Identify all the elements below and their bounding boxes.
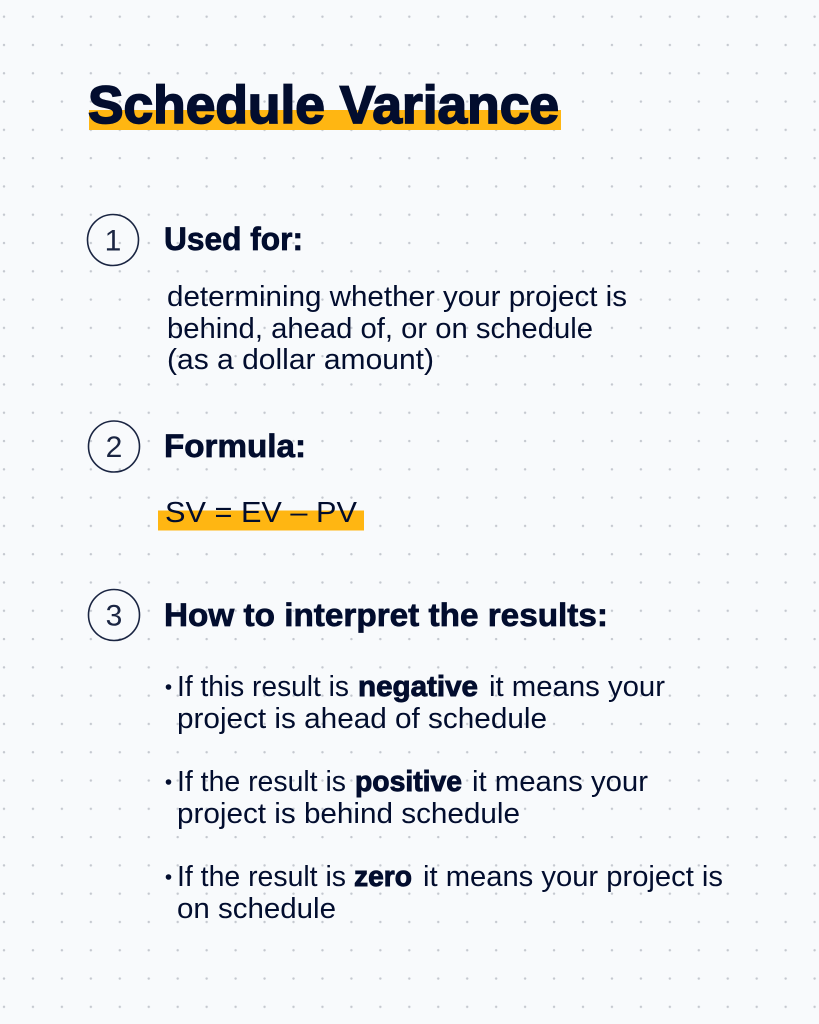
bullet: zero result: on schedule <box>177 893 336 925</box>
section 1: used for <box>88 214 627 376</box>
badge: number 3 <box>88 590 140 640</box>
badge: number 2: 2 <box>106 431 122 464</box>
heading: how to interpret: How to interpret the results: <box>164 597 608 633</box>
bullet: zero result: zero <box>354 861 412 893</box>
text block: used for description: (as a dollar amount) <box>167 344 434 376</box>
badge: number 1 <box>88 214 138 266</box>
bullet: positive result: positive <box>355 766 462 798</box>
text block: used for description: determining whether your project is <box>167 281 627 313</box>
bullet: negative result <box>166 671 666 735</box>
bullet: negative result: it means your <box>489 671 666 703</box>
title with highlight: Schedule Variance <box>88 76 559 135</box>
section 3: interpreting results <box>88 590 723 925</box>
bullet: zero result <box>166 861 723 925</box>
badge: number 2 <box>88 421 140 472</box>
bullet: positive result: it means your <box>472 766 649 798</box>
bullet: positive result: If the result is <box>177 766 346 798</box>
section 2: formula <box>88 421 364 530</box>
bullet: positive result: project is behind schedule <box>177 798 520 830</box>
bullet: negative result: If this result is <box>177 671 349 703</box>
text block: used for description: behind, ahead of, or on schedule <box>167 313 593 345</box>
badge: number 3: 3 <box>106 600 122 632</box>
bullet: positive result <box>166 766 649 830</box>
formula with highlight: SV = EV – PV <box>165 497 357 529</box>
text block: used for description <box>167 281 627 376</box>
bullet: negative result: project is ahead of schedule <box>177 703 547 735</box>
heading: formula: Formula: <box>164 428 306 464</box>
bullet: zero result: If the result is <box>177 861 346 893</box>
bullet: negative result: negative <box>358 671 478 703</box>
heading: used for: Used for: <box>164 221 303 257</box>
badge: number 1: 1 <box>105 224 121 258</box>
bullet: zero result: it means your project is <box>423 861 723 893</box>
